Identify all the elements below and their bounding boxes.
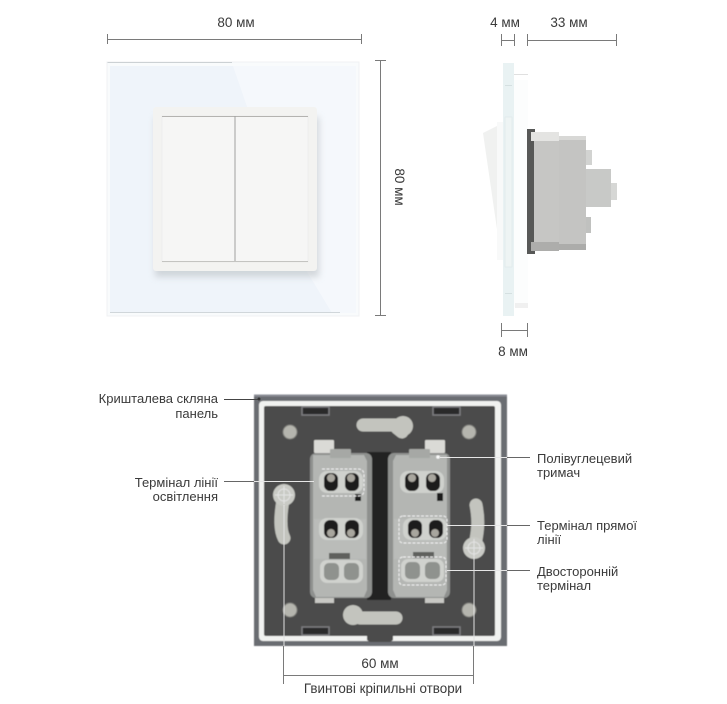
centre channel (367, 452, 391, 600)
rear terminal block (586, 169, 611, 207)
dimension: 8 мм (498, 323, 528, 359)
left rocker (162, 116, 235, 262)
back view of switch (254, 395, 507, 646)
label: Полівуглецевий тримач: Полівуглецевий (537, 451, 632, 466)
dimension: 80 мм height (375, 60, 407, 316)
white rim (259, 401, 501, 641)
metal tabs (314, 440, 334, 453)
front view: glass panel with double rocker switch (107, 62, 359, 316)
label: Термінал прямої лінії: Термінал прямої (537, 518, 637, 533)
label: Гвинтові кріпильні отвори: Гвинтові кріпильні отвори (304, 681, 462, 696)
label: Полівуглецевий тримач: тримач (537, 465, 580, 480)
dimension: 33 мм (528, 15, 616, 46)
dimension: 80 мм width: 80 мм (217, 15, 255, 30)
rocker side (483, 126, 499, 243)
label: Термінал лінії освітлення: освітлення (153, 489, 218, 504)
side view of switch (483, 63, 617, 316)
label: Термінал прямої лінії (447, 518, 637, 547)
right module (388, 449, 450, 598)
dimension: 4 мм: 4 мм (490, 15, 520, 30)
dimension: 8 мм: 8 мм (498, 344, 528, 359)
label: Кришталева скляна панель (99, 391, 260, 421)
switch frame (153, 107, 317, 271)
dimension: 33 мм: 33 мм (550, 15, 588, 30)
label: Двосторонній термінал (447, 564, 618, 593)
label: Двосторонній термінал: Двосторонній (537, 564, 618, 579)
dark back plate (264, 406, 495, 636)
corner holes (283, 425, 476, 617)
left module terminals (319, 469, 364, 583)
screw crosshairs (275, 486, 483, 557)
dimension: 80 мм height: 80 мм (392, 168, 407, 206)
clips (302, 407, 460, 635)
label: Кришталева скляна панель: Кришталева скляна (99, 391, 219, 406)
label: Двосторонній термінал: термінал (537, 578, 591, 593)
back module dark plate (527, 129, 535, 254)
right rocker (235, 116, 308, 262)
label: Кришталева скляна панель: панель (175, 406, 218, 421)
label: Термінал лінії освітлення (135, 475, 314, 504)
dimension: 60 мм with screw hole leaders (284, 505, 474, 684)
label: Термінал прямої лінії: лінії (537, 532, 562, 547)
mounting slots (273, 416, 485, 625)
housing rear (559, 136, 586, 250)
housing front (534, 133, 559, 251)
label: Термінал лінії освітлення: Термінал лінії (135, 475, 218, 490)
dimension: 4 мм (490, 15, 520, 46)
right module terminals (399, 455, 447, 585)
left module (310, 449, 372, 598)
glass edge (503, 63, 514, 316)
dimension: 80 мм width (108, 15, 362, 44)
dimension: 60 мм with screw hole leaders: 60 мм (361, 656, 399, 671)
label: Полівуглецевий тримач (440, 451, 632, 480)
